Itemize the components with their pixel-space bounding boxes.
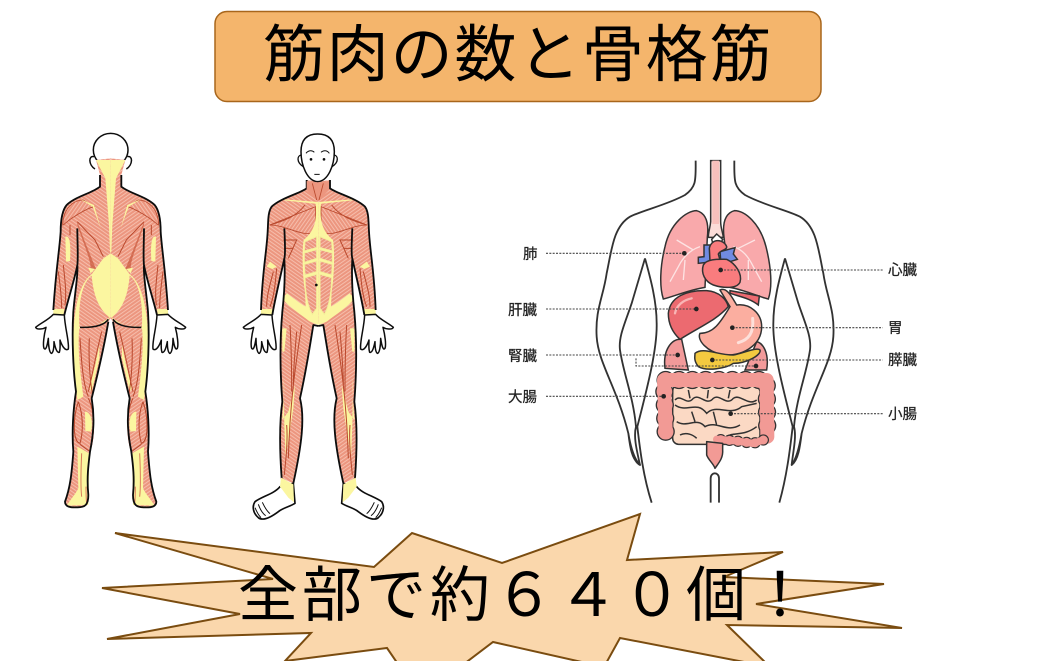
head and face, front view — [298, 134, 337, 286]
label: large intestine: 大腸 — [508, 389, 537, 406]
label: kidney: 腎臓 — [508, 348, 537, 365]
organ marker dots — [661, 251, 758, 416]
body outline — [596, 161, 834, 503]
liver — [668, 291, 728, 339]
trachea — [708, 161, 723, 237]
lungs — [661, 211, 771, 299]
label: pancreas: 膵臓 — [888, 352, 917, 369]
label: lung: 肺 — [523, 246, 538, 263]
leader lines — [546, 253, 883, 414]
label: heart: 心臓 — [888, 262, 917, 279]
callout text: 全部で約６４０個！ — [238, 562, 814, 629]
stomach — [699, 289, 762, 355]
heart — [698, 234, 741, 287]
illustration: muscles, front view — [243, 134, 393, 519]
label: stomach: 胃 — [888, 321, 902, 337]
label: liver: 肝臓 — [508, 302, 537, 319]
title banner — [215, 12, 821, 102]
title text: 筋肉の数と骨格筋 — [263, 21, 773, 90]
pancreas — [695, 349, 760, 369]
label: small intestine: 小腸 — [888, 406, 917, 423]
spleen — [730, 291, 759, 305]
illustration: muscles, back view — [36, 133, 186, 507]
organ labels — [508, 246, 917, 423]
large intestine — [664, 380, 767, 468]
small intestine — [673, 385, 760, 444]
kidneys — [665, 339, 767, 370]
head, back view — [90, 133, 131, 169]
callout: starburst — [102, 514, 902, 661]
illustration: internal organs — [546, 161, 883, 503]
